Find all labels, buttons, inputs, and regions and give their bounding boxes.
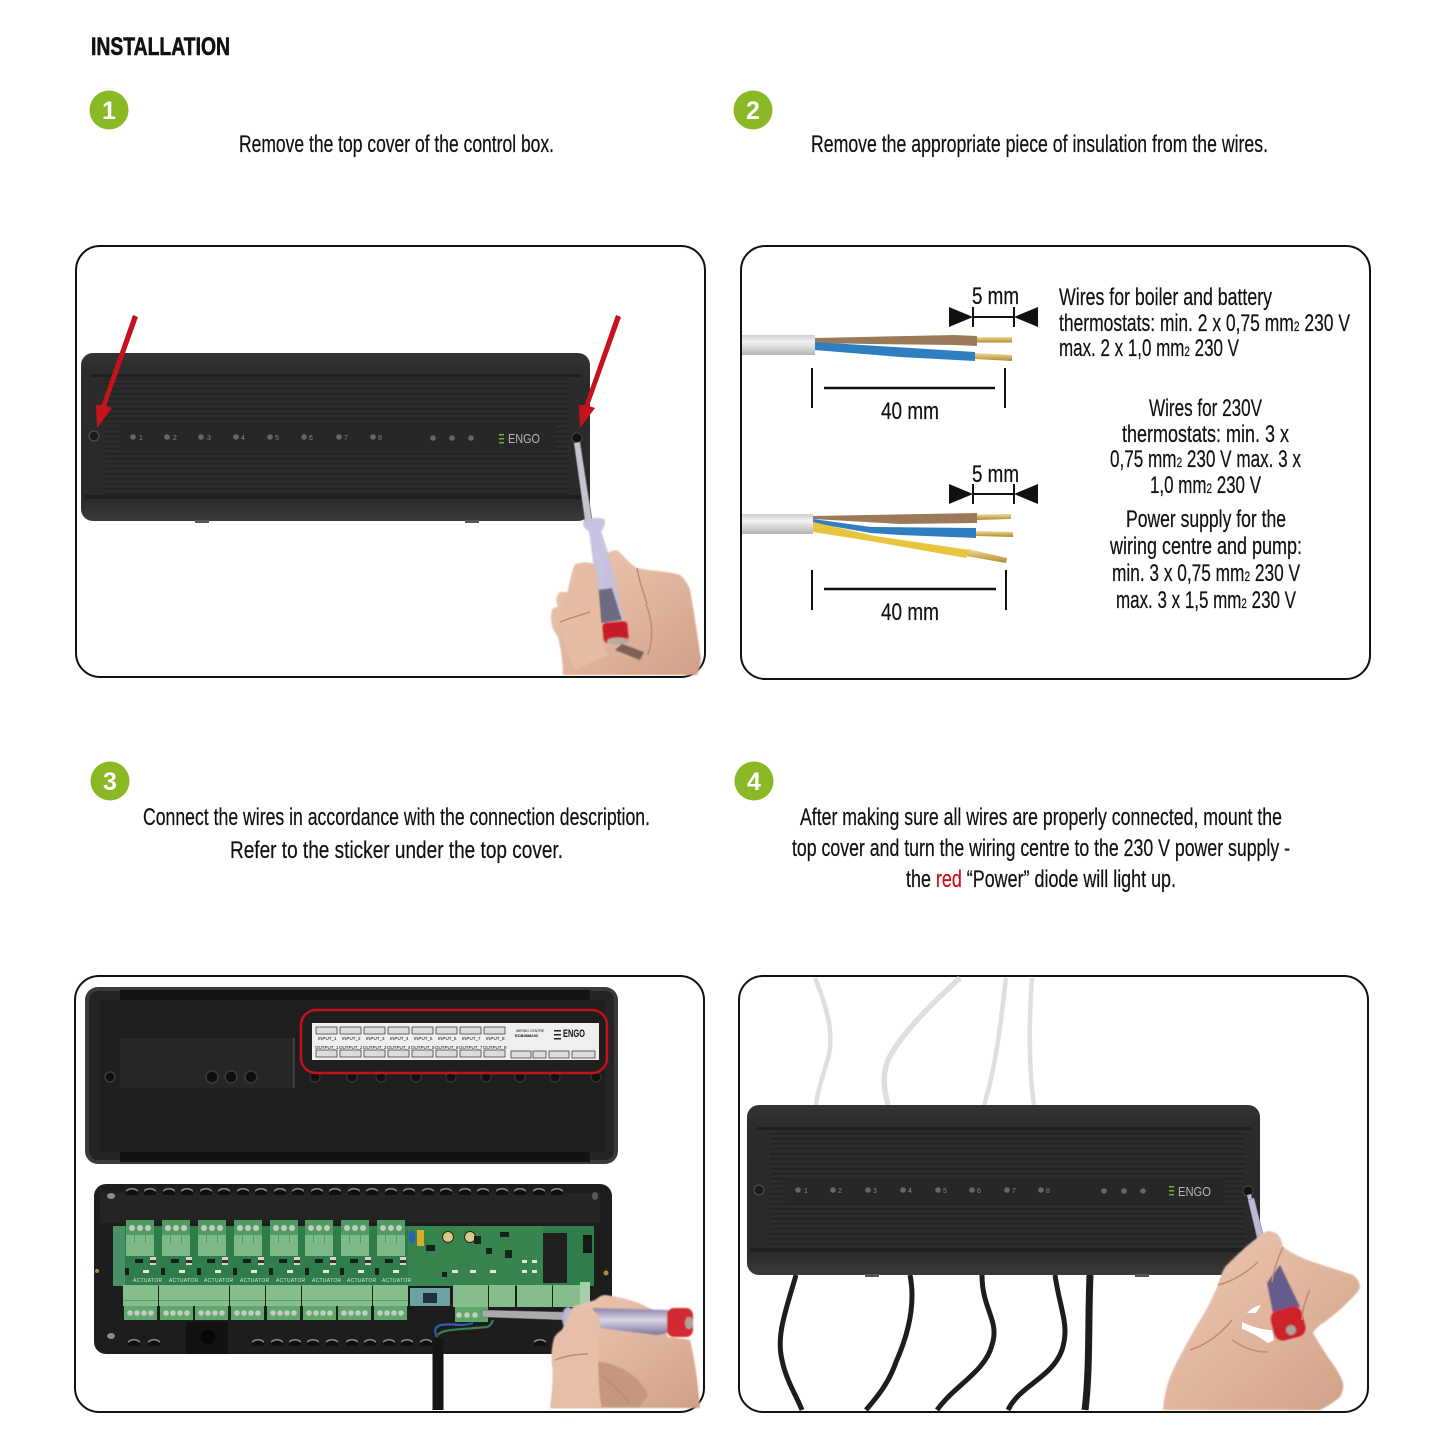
connection sticker: INPUT_5 bbox=[414, 1036, 433, 1041]
connection sticker: OUTPUT_3 bbox=[363, 1045, 387, 1050]
closed control box: 2 bbox=[838, 1188, 842, 1195]
black wires bbox=[780, 1275, 1090, 1410]
hand holding screwdriver bbox=[551, 442, 701, 675]
control box photo bbox=[81, 353, 590, 523]
step 2 badge bbox=[734, 90, 772, 130]
connection sticker: OUTPUT_2 bbox=[339, 1045, 363, 1050]
step 3 instruction: Refer to the sticker under the top cover. bbox=[230, 837, 563, 864]
connection sticker: OUTPUT_6 bbox=[435, 1045, 459, 1050]
screwdriver shaft bbox=[574, 442, 592, 521]
open base with circuit board: ACTUATOR bbox=[169, 1278, 199, 1284]
control box photo: 1 bbox=[139, 435, 143, 442]
step 2 badge: 2 bbox=[746, 97, 760, 125]
step 3 instruction bbox=[143, 804, 650, 864]
connection sticker: INPUT_8 bbox=[486, 1036, 505, 1041]
connection sticker: ECB08M230 bbox=[515, 1033, 539, 1038]
connection sticker: OUTPUT_8 bbox=[483, 1045, 507, 1050]
connection sticker: INPUT_4 bbox=[390, 1036, 409, 1041]
control box photo: 6 bbox=[309, 435, 313, 442]
closed control box: 3 bbox=[873, 1188, 877, 1195]
terminal blocks bbox=[123, 1220, 408, 1320]
text: 230 V thermostat wires: thermostats: min. 3 x bbox=[1122, 421, 1289, 448]
screwdriver handle bbox=[583, 518, 644, 660]
text: 230 V thermostat wires: 1,0 mm2 230 V bbox=[1150, 472, 1261, 499]
hand holding screwdriver bbox=[1163, 1194, 1360, 1410]
panel 3: wiring bbox=[75, 976, 704, 1412]
step 4 instruction: the red “Power” diode will light up. bbox=[906, 866, 1176, 893]
thumb bbox=[560, 563, 608, 670]
connection sticker: OUTPUT_5 bbox=[411, 1045, 435, 1050]
closed control box: 6 bbox=[977, 1188, 981, 1195]
dimension: 5 mm upper bbox=[949, 283, 1038, 327]
open base with circuit board bbox=[94, 1184, 612, 1354]
closed control box: 7 bbox=[1012, 1188, 1016, 1195]
dimension: 5 mm lower bbox=[949, 461, 1038, 504]
open base with circuit board: ACTUATOR bbox=[276, 1278, 306, 1284]
control box photo: 8 bbox=[378, 435, 382, 442]
open base with circuit board: ACTUATOR bbox=[347, 1278, 377, 1284]
hand bbox=[551, 550, 701, 675]
fingers and palm bbox=[550, 1295, 700, 1408]
closed control box: ENGO bbox=[1178, 1184, 1211, 1199]
shaft bbox=[482, 1310, 563, 1320]
dimension: 5 mm lower: 5 mm bbox=[972, 461, 1019, 488]
power cable and wires bbox=[435, 1320, 493, 1410]
open base with circuit board: ACTUATOR bbox=[204, 1278, 234, 1284]
connection sticker: OUTPUT_7 bbox=[459, 1045, 483, 1050]
text: 230 V thermostat wires bbox=[1110, 395, 1301, 499]
finger creases bbox=[560, 568, 652, 655]
step 4 instruction: After making sure all wires are properly connected, mount the bbox=[800, 804, 1282, 831]
panel 1: removing the cover bbox=[76, 246, 705, 677]
connection sticker bbox=[312, 1023, 599, 1060]
text: power supply wires: wiring centre and pump: bbox=[1109, 533, 1302, 560]
step 1 badge: 1 bbox=[102, 97, 116, 125]
text: boiler and battery thermostat wires: Wires for boiler and battery bbox=[1059, 284, 1272, 311]
text: power supply wires bbox=[1109, 506, 1302, 614]
connection sticker: INPUT_7 bbox=[462, 1036, 481, 1041]
control box photo: ENGO bbox=[508, 431, 540, 446]
dimension: 40 mm upper bbox=[812, 368, 1005, 425]
step 1 badge bbox=[90, 90, 128, 130]
step 2 instruction: Remove the appropriate piece of insulation from the wires. bbox=[811, 131, 1268, 158]
title: INSTALLATION bbox=[91, 33, 230, 61]
step 3 instruction: Connect the wires in accordance with the connection description. bbox=[143, 804, 650, 831]
open base with circuit board: ACTUATOR bbox=[240, 1278, 270, 1284]
step 4 instruction bbox=[792, 804, 1290, 893]
red highlight around sticker bbox=[301, 1010, 607, 1073]
connection sticker: INPUT_3 bbox=[366, 1036, 385, 1041]
connection sticker: INPUT_2 bbox=[342, 1036, 361, 1041]
text: power supply wires: max. 3 x 1,5 mm2 230 V bbox=[1116, 587, 1296, 614]
control box photo: 3 bbox=[207, 435, 211, 442]
screwdriver shaft bbox=[1247, 1194, 1262, 1239]
connection sticker: WIRING CENTRE bbox=[516, 1029, 545, 1033]
open base with circuit board: ACTUATOR bbox=[133, 1278, 163, 1284]
hand bbox=[1163, 1231, 1360, 1410]
closed control box: 8 bbox=[1046, 1188, 1050, 1195]
hand holding screwdriver bbox=[482, 1295, 700, 1408]
dimension: 5 mm upper: 5 mm bbox=[972, 283, 1019, 310]
connection sticker: INPUT_6 bbox=[438, 1036, 457, 1041]
text: power supply wires: min. 3 x 0,75 mm2 230 V bbox=[1112, 560, 1300, 587]
open base with circuit board: ACTUATOR bbox=[312, 1278, 342, 1284]
connection sticker: INPUT_1 bbox=[318, 1036, 337, 1041]
gap between fingers bbox=[1242, 1322, 1274, 1343]
finger creases bbox=[1190, 1247, 1310, 1352]
transparent handle and red cap bbox=[562, 1307, 693, 1337]
dimension: 40 mm lower bbox=[812, 570, 1006, 626]
step 3 badge: 3 bbox=[103, 768, 117, 796]
closed control box: 5 bbox=[943, 1188, 947, 1195]
three-core cable bbox=[742, 513, 1013, 563]
control box photo: 2 bbox=[173, 435, 177, 442]
step 1 instruction: Remove the top cover of the control box. bbox=[239, 131, 554, 158]
dimension: 40 mm lower: 40 mm bbox=[881, 599, 939, 626]
text: 230 V thermostat wires: 0,75 mm2 230 V max. 3 x bbox=[1110, 446, 1301, 473]
control box photo: 5 bbox=[275, 435, 279, 442]
panel 4: closing and powering up bbox=[739, 976, 1368, 1412]
text: boiler and battery thermostat wires: max. 2 x 1,0 mm2 230 V bbox=[1059, 335, 1239, 362]
step 3 badge bbox=[90, 762, 130, 800]
connection sticker: OUTPUT_4 bbox=[387, 1045, 411, 1050]
closed control box: 4 bbox=[908, 1188, 912, 1195]
control box photo: 4 bbox=[241, 435, 245, 442]
step 4 badge: 4 bbox=[747, 768, 761, 796]
dimension: 40 mm upper: 40 mm bbox=[881, 398, 939, 425]
step 4 badge bbox=[734, 762, 774, 800]
top cover, inside view bbox=[85, 987, 618, 1164]
text: boiler and battery thermostat wires bbox=[1059, 284, 1350, 362]
handle and red cap bbox=[1267, 1265, 1308, 1343]
connection sticker: ENGO bbox=[563, 1028, 585, 1040]
text: power supply wires: Power supply for the bbox=[1126, 506, 1286, 533]
control box photo: 7 bbox=[344, 435, 348, 442]
arrow: left screw bbox=[96, 315, 138, 428]
connection sticker: OUTPUT_1 bbox=[315, 1045, 339, 1050]
white wires bbox=[815, 978, 1034, 1105]
two-core cable bbox=[742, 335, 1012, 361]
text: boiler and battery thermostat wires: thermostats: min. 2 x 0,75 mm2 230 V bbox=[1059, 310, 1350, 337]
closed control box bbox=[747, 1105, 1260, 1277]
closed control box: 1 bbox=[804, 1188, 808, 1195]
text: 230 V thermostat wires: Wires for 230V bbox=[1149, 395, 1262, 422]
panel 2: wire stripping bbox=[741, 246, 1370, 679]
open base with circuit board: ACTUATOR bbox=[382, 1278, 412, 1284]
thumb bbox=[552, 1306, 602, 1408]
arrow: right screw bbox=[579, 315, 621, 428]
